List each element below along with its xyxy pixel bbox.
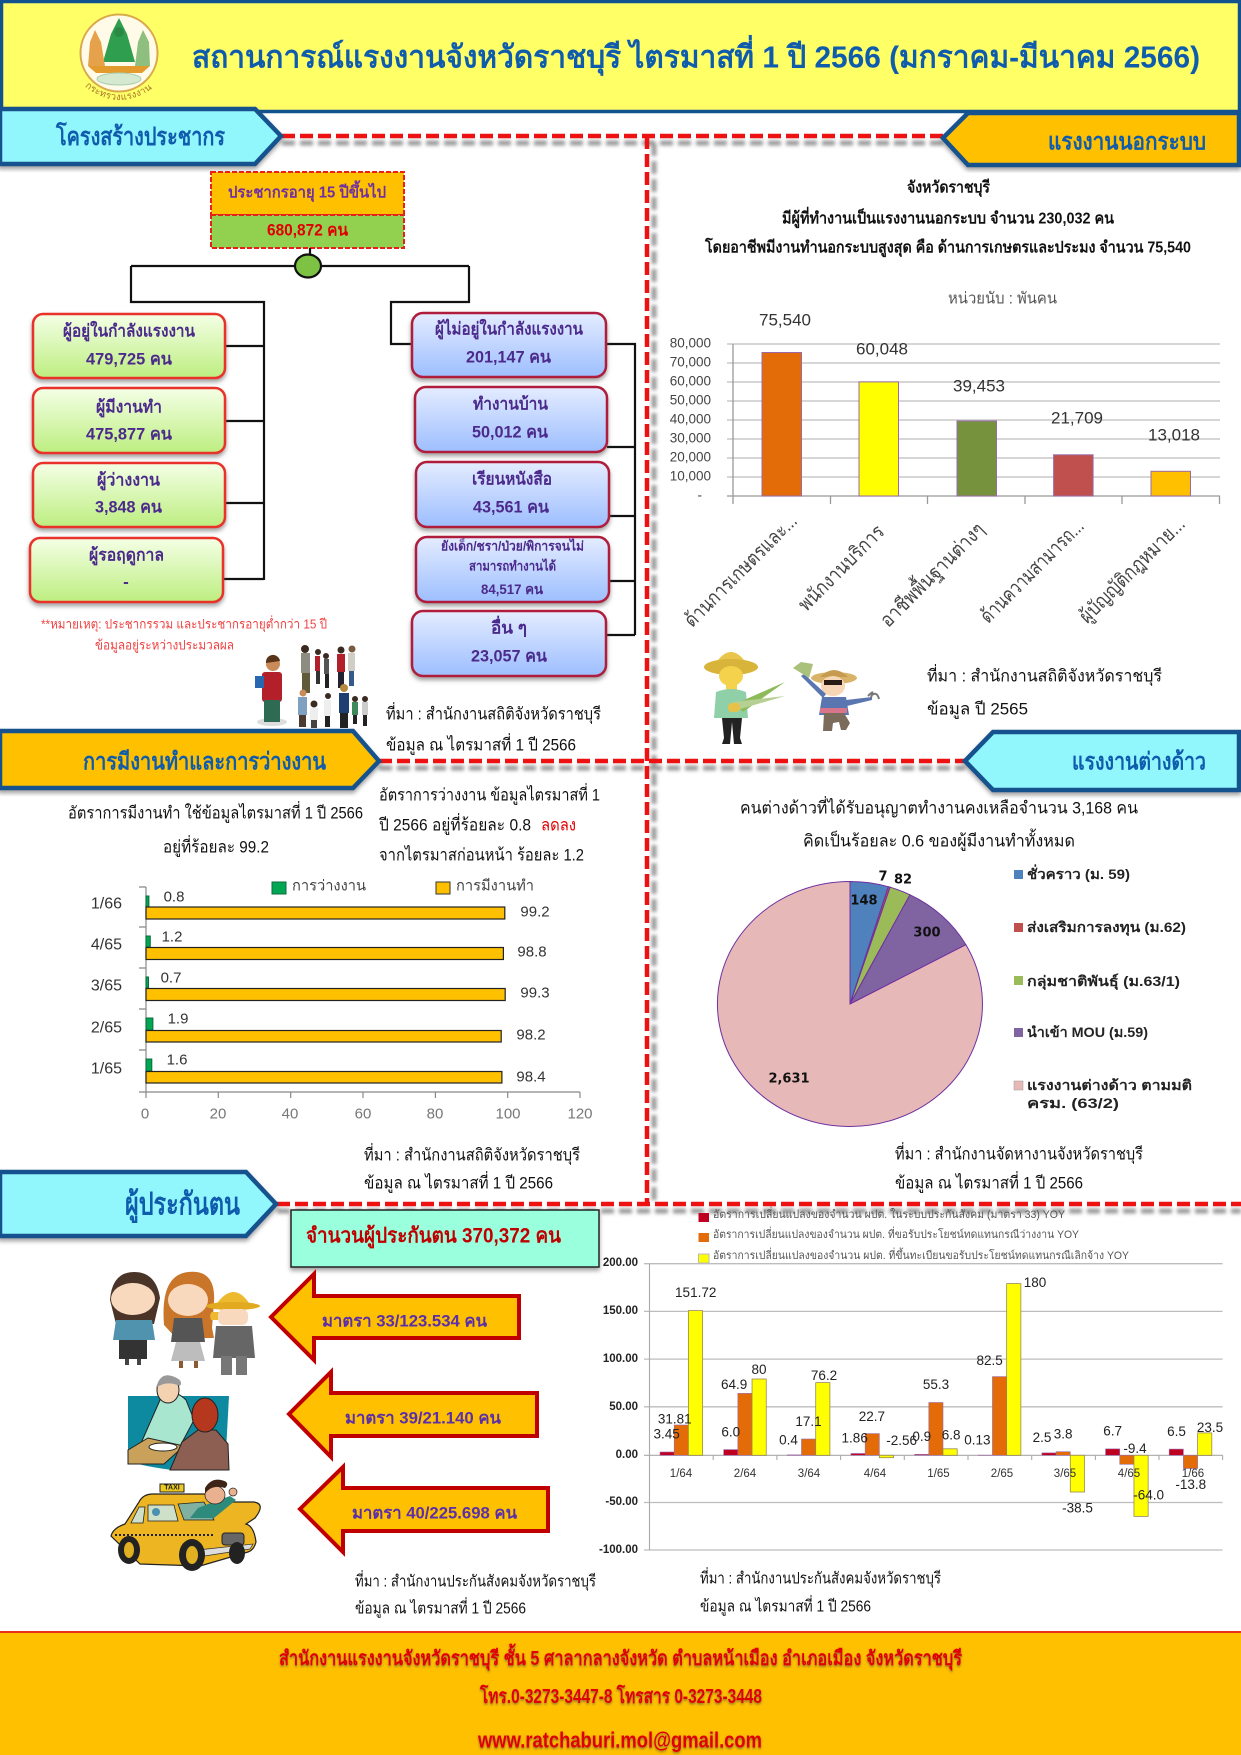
section tab: employment: การมีงานทำและการว่างงาน	[83, 748, 326, 776]
text block: unemployment rate: ปี 2566 อยู่ที่ร้อยละ 0.8	[378, 812, 531, 836]
bar chart: insured change YOY: 1/64	[670, 1468, 693, 1480]
legend: employment chart: การว่างงาน	[292, 878, 366, 894]
bar chart: insured change YOY: 17.1	[795, 1414, 822, 1429]
legend: YOY chart: อัตราการเปลี่ยนแปลงของจำนวน ผปต. ในระบบประกันสังคม (มาตรา 33) YOY	[713, 1206, 1066, 1221]
section tab: migrant workers: แรงงานต่างด้าว	[1072, 748, 1206, 776]
bar chart: insured change YOY: 50.00	[609, 1401, 638, 1413]
bar chart: informal workers by occupation: หน่วยนับ : พันคน	[948, 290, 1057, 308]
bar chart: informal workers by occupation	[670, 290, 1220, 632]
bar chart: employment and unemployment: 1/66	[91, 896, 122, 912]
bar chart: employment and unemployment: 20	[210, 1106, 226, 1122]
bar chart: insured change YOY: 80	[751, 1362, 767, 1377]
footer	[0, 1632, 1241, 1755]
title: สถานการณ์แรงงานจังหวัดราชบุรี ไตรมาสที่ 1 ปี 2566 (มกราคม-มีนาคม 2566)	[192, 34, 1200, 76]
pie chart: migrant workers: 82	[894, 872, 912, 888]
bar chart: insured change YOY: -50.00	[605, 1496, 638, 1508]
box: housework: 50,012 คน	[472, 422, 548, 442]
bar chart: insured change YOY: 3.45	[653, 1426, 680, 1442]
panel: population total box	[211, 172, 404, 248]
bar chart: insured change YOY: 3.8	[1054, 1426, 1073, 1442]
legend: YOY chart	[698, 1206, 1130, 1263]
bar chart: insured change YOY: 150.00	[603, 1305, 638, 1317]
source: employment: ที่มา : สำนักงานสถิติจังหวัดราชบุรี	[364, 1142, 580, 1166]
box: studying: เรียนหนังสือ	[472, 468, 552, 488]
box: in labour force	[33, 314, 225, 378]
bar chart: insured change YOY: 0.4	[779, 1432, 798, 1448]
bar chart: insured change YOY: -100.00	[599, 1544, 638, 1556]
source: YOY chart: ที่มา : สำนักงานประกันสังคมจังหวัดราชบุรี	[700, 1566, 941, 1588]
box: in labour force: 479,725 คน	[86, 350, 172, 368]
bar chart: informal workers by occupation: 75,540	[759, 310, 811, 330]
bar chart: insured change YOY: 3/65	[1054, 1468, 1076, 1480]
arrow: section 39: มาตรา 39/21.140 คน	[345, 1408, 501, 1428]
bar chart: informal workers by occupation: ด้านความสามารถ...	[976, 515, 1089, 628]
box: others: 23,057 คน	[471, 646, 547, 666]
bar chart: insured change YOY: 151.72	[675, 1285, 716, 1300]
text block: employment rate	[68, 800, 363, 858]
bar chart: insured change YOY: 6.0	[721, 1424, 740, 1440]
bar chart: insured change YOY: -64.0	[1133, 1488, 1164, 1502]
arrow: section 40: มาตรา 40/225.698 คน	[352, 1504, 517, 1522]
pie chart: migrant workers: 300	[913, 926, 941, 940]
box: not in labour force	[412, 313, 606, 377]
bar chart: insured change YOY: 0.13	[964, 1432, 991, 1448]
text block: employment rate: อยู่ที่ร้อยละ 99.2	[163, 834, 269, 858]
bar chart: informal workers by occupation: 40,000	[670, 412, 711, 426]
bar chart: insured change YOY	[599, 1206, 1223, 1556]
section tab: informal workers	[943, 113, 1239, 165]
legend: migrant pie: ชั่วคราว (ม. 59)	[1027, 864, 1130, 882]
bar chart: employment and unemployment: 40	[282, 1106, 298, 1122]
bar chart: insured change YOY: 31.81	[658, 1412, 692, 1426]
footer: www.ratchaburi.mol@gmail.com	[477, 1728, 762, 1752]
box: in labour force: ผู้อยู่ในกำลังแรงงาน	[63, 320, 195, 342]
bar chart: employment and unemployment: 4/65	[91, 936, 122, 954]
pie chart: migrant workers: 2,631	[768, 1072, 810, 1086]
footer: สำนักงานแรงงานจังหวัดราชบุรี ชั้น 5 ศาลากลางจังหวัด ตำบลหน้าเมือง อำเภอเมือง จังหวัดราชบุรี	[279, 1643, 962, 1671]
legend: employment chart: การมีงานทำ	[456, 878, 534, 894]
box: not in labour force: 201,147 คน	[466, 348, 551, 366]
bar chart: insured change YOY: -9.4	[1123, 1441, 1147, 1456]
box: unemployed: 3,848 คน	[95, 498, 162, 516]
box: seasonal: ผู้รอฤดูกาล	[89, 546, 164, 566]
box: unable to work: ยังเด็ก/ชรา/ป่วย/พิการจนไม่	[441, 536, 584, 554]
legend: YOY chart: อัตราการเปลี่ยนแปลงของจำนวน ผปต. ที่ขึ้นทะเบียนขอรับประโยชน์ทดแทนกรณีเลิกจ้าง YOY	[713, 1247, 1130, 1262]
pie chart: migrant workers: 148	[850, 894, 878, 908]
panel: outside labour force boxes	[412, 313, 609, 676]
source: informal: ที่มา : สำนักงานสถิติจังหวัดราชบุรี	[927, 664, 1162, 686]
section tab: employment	[0, 731, 379, 788]
footer: โทร.0-3273-3447-8 โทรสาร 0-3273-3448	[479, 1684, 762, 1708]
bar chart: informal workers by occupation: 80,000	[670, 336, 711, 350]
bar chart: insured change YOY: 6.8	[942, 1428, 961, 1442]
note: population remark: **หมายเหตุ: ประชากรรวม และประชากรอายุต่ำกว่า 15 ปี	[41, 616, 327, 632]
arrow: section 39	[289, 1372, 537, 1457]
legend: migrant pie: แรงงานต่างด้าว ตามมติ	[1027, 1077, 1192, 1093]
source: migrant	[895, 1142, 1143, 1194]
bar chart: insured change YOY: 180	[1024, 1275, 1046, 1290]
box: seasonal	[30, 538, 223, 602]
bar chart: insured change YOY: -2.56	[886, 1433, 917, 1448]
section tab: population structure: โครงสร้างประชากร	[55, 121, 225, 151]
box: others	[412, 611, 606, 676]
bar chart: employment and unemployment: 98.8	[517, 944, 547, 960]
bar chart: employment and unemployment: 99.3	[520, 984, 550, 1002]
source: informal: ข้อมูล ปี 2565	[927, 700, 1028, 720]
bar chart: insured change YOY: 2/65	[991, 1468, 1013, 1480]
bar chart: insured change YOY: 82.5	[976, 1353, 1003, 1368]
icon: ministry of labour seal: กระทรวงแรงงาน	[86, 84, 152, 100]
bar chart: insured change YOY: 200.00	[603, 1257, 638, 1269]
text block: informal workers summary: โดยอาชีพมีงานทำนอกระบบสูงสุด คือ ด้านการเกษตรและประมง จำนวน 75,540	[704, 236, 1191, 258]
legend: migrant pie: นำเข้า MOU (ม.59)	[1027, 1024, 1148, 1040]
arrow: section 40	[300, 1467, 548, 1552]
callout: total insured	[291, 1210, 599, 1267]
bar chart: informal workers by occupation: พนักงานบริการ	[794, 521, 889, 616]
bar chart: insured change YOY: 3/64	[798, 1468, 821, 1480]
bar chart: insured change YOY: 0.9	[912, 1429, 931, 1444]
bar chart: employment and unemployment: 98.4	[516, 1068, 546, 1086]
bar chart: insured change YOY: 6.5	[1167, 1424, 1186, 1439]
bar chart: insured change YOY: 55.3	[923, 1377, 949, 1392]
text block: informal workers summary: จังหวัดราชบุรี	[907, 178, 990, 198]
legend: migrant pie: ส่งเสริมการลงทุน (ม.62)	[1027, 919, 1186, 936]
section tab: insured persons: ผู้ประกันตน	[125, 1186, 240, 1224]
text block: unemployment rate: จากไตรมาสก่อนหน้า ร้อยละ 1.2	[379, 844, 584, 864]
source: YOY chart: ข้อมูล ณ ไตรมาสที่ 1 ปี 2566	[700, 1594, 871, 1616]
bar chart: insured change YOY: 2.5	[1033, 1430, 1051, 1445]
source: YOY chart	[700, 1566, 941, 1616]
bar chart: employment and unemployment: 1.2	[162, 928, 182, 946]
bar chart: employment and unemployment: 100	[495, 1106, 521, 1122]
icon: taxi driver: TAXI	[164, 1484, 180, 1492]
legend: migrant pie: ครม. (63/2)	[1027, 1095, 1119, 1111]
arrow: section 33: มาตรา 33/123.534 คน	[322, 1312, 487, 1330]
dashed section dividers	[277, 136, 1241, 1211]
bar chart: employment and unemployment: 0.8	[164, 888, 184, 906]
source: employment	[364, 1142, 580, 1194]
bar chart: employment and unemployment: 0	[141, 1106, 149, 1122]
section tab: informal workers: แรงงานนอกระบบ	[1048, 128, 1206, 156]
source: population: ที่มา : สำนักงานสถิติจังหวัดราชบุรี	[386, 702, 601, 724]
icon: farmer with rice	[704, 652, 785, 744]
pie chart: migrant workers: 7	[878, 870, 888, 884]
box: employed	[33, 388, 225, 453]
bar chart: informal workers by occupation: ด้านการเกษตรและ...	[680, 510, 802, 632]
bar chart: insured change YOY: 23.5	[1197, 1420, 1223, 1435]
bar chart: insured change YOY: 64.9	[721, 1377, 747, 1392]
bar chart: insured change YOY: 4/64	[864, 1468, 887, 1480]
bar chart: employment and unemployment: 120	[567, 1106, 593, 1122]
bar chart: employment and unemployment: 1/65	[91, 1060, 122, 1078]
box: seasonal: -	[123, 572, 129, 592]
box: unable to work: สามารถทำงานได้	[469, 558, 556, 574]
source: informal	[927, 664, 1162, 720]
bar chart: insured change YOY: 2/64	[734, 1468, 757, 1480]
bar chart: informal workers by occupation: 21,709	[1051, 408, 1103, 428]
callout: total insured: จำนวนผู้ประกันตน 370,372 คน	[306, 1224, 562, 1250]
icon: office consultation	[128, 1375, 229, 1470]
bar chart: insured change YOY: -38.5	[1062, 1500, 1093, 1516]
source: migrant: ข้อมูล ณ ไตรมาสที่ 1 ปี 2566	[895, 1170, 1083, 1194]
source: employment: ข้อมูล ณ ไตรมาสที่ 1 ปี 2566	[364, 1170, 553, 1194]
section tab: population structure	[0, 109, 281, 164]
bar chart: employment and unemployment: 60	[355, 1106, 371, 1122]
text block: employment rate: อัตราการมีงานทำ ใช้ข้อมูลไตรมาสที่ 1 ปี 2566	[68, 800, 363, 824]
icon: taxi driver	[111, 1480, 260, 1571]
box: studying: 43,561 คน	[473, 498, 549, 516]
source: insured: ข้อมูล ณ ไตรมาสที่ 1 ปี 2566	[355, 1596, 526, 1618]
bar chart: insured change YOY: 100.00	[603, 1353, 638, 1365]
bar chart: insured change YOY: 4/65	[1118, 1468, 1140, 1480]
box: unemployed	[33, 463, 225, 527]
box: others: อื่น ๆ	[491, 616, 527, 638]
box: employed: 475,877 คน	[86, 424, 172, 444]
bar chart: employment and unemployment: 2/65	[91, 1020, 122, 1036]
bar chart: employment and unemployment: 98.2	[516, 1026, 546, 1044]
arrow: section 33	[271, 1274, 519, 1360]
bar chart: insured change YOY: 1.86	[842, 1430, 868, 1446]
bar chart: insured change YOY: 76.2	[811, 1368, 837, 1383]
bar chart: employment and unemployment: 1.6	[167, 1052, 187, 1068]
source: population: ข้อมูล ณ ไตรมาสที่ 1 ปี 2566	[386, 732, 576, 756]
text block: migrant workers summary	[740, 796, 1138, 852]
panel: population total box: ประชากรอายุ 15 ปีขึ้นไป	[228, 180, 386, 202]
bar chart: informal workers by occupation: 30,000	[670, 430, 711, 446]
bar chart: insured change YOY: 0.00	[616, 1449, 638, 1461]
text block: informal workers summary: มีผู้ที่ทำงานเป็นแรงงานนอกระบบ จำนวน 230,032 คน	[782, 206, 1114, 230]
bar chart: informal workers by occupation: 50,000	[670, 392, 711, 408]
source: population	[386, 702, 601, 756]
bar chart: informal workers by occupation: อาชีพพื้นฐานต่างๆ	[873, 516, 989, 632]
bar chart: insured change YOY: -13.8	[1175, 1477, 1206, 1492]
source: insured	[355, 1570, 596, 1618]
bar chart: informal workers by occupation: ผู้บัญญัติกฎหมาย...	[1075, 513, 1190, 628]
bar chart: insured change YOY: 1/66	[1182, 1468, 1204, 1480]
bar chart: informal workers by occupation: -	[698, 488, 702, 502]
bar chart: employment and unemployment: 3/65	[91, 978, 122, 994]
box: employed: ผู้มีงานทำ	[96, 396, 162, 418]
bar chart: employment and unemployment	[91, 878, 593, 1122]
box: not in labour force: ผู้ไม่อยู่ในกำลังแรงงาน	[435, 318, 583, 340]
tree connectors	[131, 248, 635, 635]
text block: migrant workers summary: คิดเป็นร้อยละ 0.6 ของผู้มีงานทำทั้งหมด	[803, 828, 1075, 852]
bar chart: informal workers by occupation: 39,453	[953, 376, 1005, 396]
box: unemployed: ผู้ว่างงาน	[97, 470, 160, 492]
legend: employment chart	[272, 878, 534, 894]
bar chart: informal workers by occupation: 60,000	[670, 374, 711, 388]
text block: unemployment rate	[378, 782, 600, 864]
bar chart: informal workers by occupation: 13,018	[1148, 426, 1200, 444]
bar chart: employment and unemployment: 0.7	[161, 970, 181, 986]
bar chart: insured change YOY: 22.7	[859, 1409, 885, 1424]
note: population remark	[41, 616, 327, 654]
bar chart: employment and unemployment: 80	[427, 1106, 443, 1122]
icon: ministry of labour seal	[80, 14, 158, 100]
box: unable to work: 84,517 คน	[481, 581, 543, 597]
bar chart: informal workers by occupation: 10,000	[670, 468, 711, 484]
section tab: migrant workers	[965, 732, 1239, 790]
legend: migrant pie: กลุ่มชาติพันธุ์ (ม.63/1)	[1027, 973, 1180, 990]
bar chart: insured change YOY: 6.7	[1103, 1424, 1122, 1438]
bar chart: informal workers by occupation: 20,000	[670, 450, 711, 464]
panel: labour force boxes	[30, 314, 225, 602]
legend: migrant pie	[1014, 864, 1192, 1111]
bar chart: informal workers by occupation: 70,000	[670, 354, 711, 370]
bar chart: informal workers by occupation: 60,048	[856, 340, 908, 358]
text block: unemployment rate: ลดลง	[541, 816, 576, 834]
text block: informal workers summary	[704, 178, 1191, 258]
text block: unemployment rate: อัตราการว่างงาน ข้อมูลไตรมาสที่ 1	[379, 782, 600, 806]
note: population remark: ข้อมูลอยู่ระหว่างประมวลผล	[95, 638, 234, 654]
bar chart: employment and unemployment: 1.9	[168, 1010, 188, 1028]
text block: migrant workers summary: คนต่างด้าวที่ได้รับอนุญาตทำงานคงเหลือจำนวน 3,168 คน	[740, 796, 1138, 818]
section tab: insured persons	[0, 1172, 276, 1236]
box: housework	[415, 387, 607, 452]
panel: population total box: 680,872 คน	[267, 220, 348, 240]
source: insured: ที่มา : สำนักงานประกันสังคมจังหวัดราชบุรี	[355, 1570, 596, 1592]
source: migrant: ที่มา : สำนักงานจัดหางานจังหวัดราชบุรี	[895, 1142, 1143, 1164]
pie chart: migrant workers	[717, 870, 982, 1126]
icon: farmer with sickle	[793, 662, 879, 731]
bar chart: employment and unemployment: 99.2	[520, 904, 550, 920]
icon: three workers	[110, 1272, 260, 1375]
box: unable to work	[416, 536, 609, 602]
header banner	[0, 0, 1241, 114]
box: housework: ทำงานบ้าน	[473, 394, 548, 414]
legend: YOY chart: อัตราการเปลี่ยนแปลงของจำนวน ผปต. ที่ขอรับประโยชน์ทดแทนกรณีว่างงาน YOY	[713, 1226, 1080, 1241]
bar chart: insured change YOY: 1/65	[927, 1468, 950, 1480]
icon: people group	[255, 645, 368, 728]
box: studying	[416, 462, 609, 527]
